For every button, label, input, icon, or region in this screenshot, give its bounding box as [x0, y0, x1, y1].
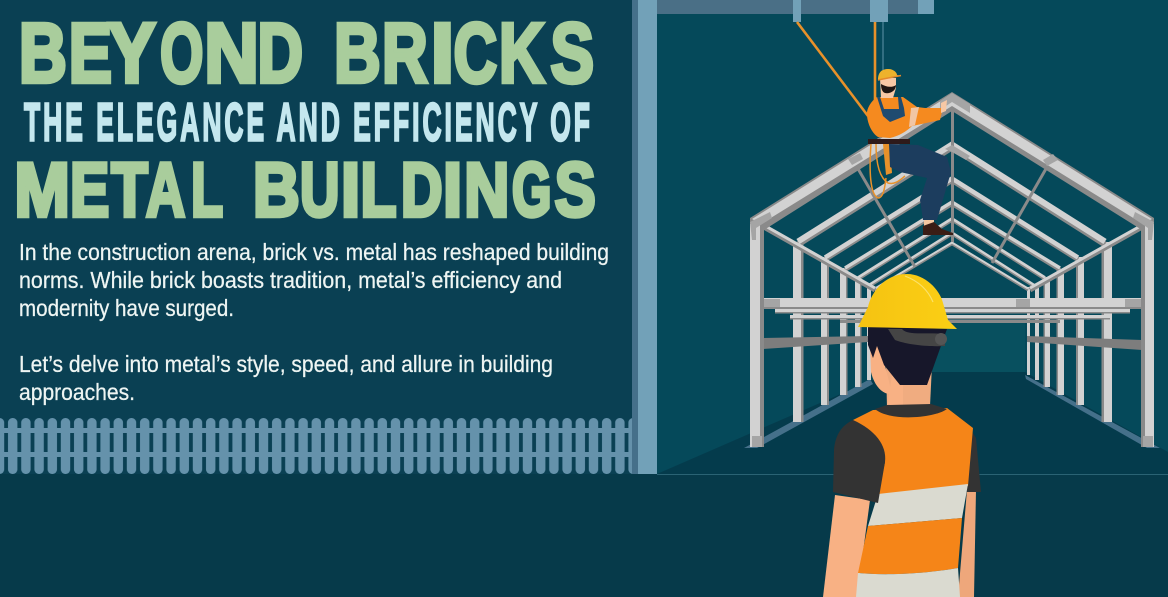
- title line: Beyond Bricks: Y: [108, 6, 156, 100]
- hard hat: [858, 274, 957, 329]
- title line: Metal Buildings: L: [361, 148, 396, 233]
- title line: Metal Buildings: B: [253, 148, 300, 233]
- subtitle line: THE ELEGANCE AND EFFICIENCY OF: [24, 94, 590, 153]
- title line: Metal Buildings: S: [555, 148, 596, 233]
- title line: Beyond Bricks: S: [550, 6, 594, 100]
- title line: Metal Buildings: N: [464, 148, 509, 233]
- title line: Metal Buildings: U: [300, 148, 339, 233]
- foreground worker: [823, 274, 981, 597]
- title line: Metal Buildings: I: [443, 148, 462, 233]
- background: ground: [0, 474, 1168, 597]
- hair: [868, 326, 947, 385]
- glove: [909, 107, 919, 127]
- title line: Metal Buildings: D: [401, 148, 442, 233]
- paragraph one: norms. While brick boasts tradition, metal’s efficiency and: [19, 267, 562, 293]
- ropes: [797, 22, 883, 116]
- shoe: [923, 222, 953, 235]
- ankle: [924, 220, 934, 226]
- side rails: [763, 336, 868, 349]
- side eave beams: [762, 226, 875, 290]
- ground line: [657, 474, 1168, 475]
- title line: Metal Buildings: L: [191, 148, 223, 233]
- title line: Beyond Bricks: E: [69, 6, 112, 100]
- hard hat: [878, 69, 901, 80]
- background: left panel: [0, 0, 632, 474]
- front left post: [750, 224, 760, 447]
- metal building frame: [744, 92, 1160, 448]
- paragraph two: Let’s delve into metal’s style, speed, and allure in building: [19, 351, 553, 377]
- receding roof trusses: [798, 144, 1105, 290]
- cross beams: [775, 309, 1130, 312]
- receding posts left: [793, 242, 878, 422]
- right arm: [958, 490, 976, 597]
- front roof truss: [750, 92, 1154, 230]
- king post: [951, 104, 954, 242]
- title line: Metal Buildings: I: [341, 148, 360, 233]
- neck: [886, 365, 932, 408]
- roof gusset plates: [750, 93, 1154, 240]
- title line: Beyond Bricks: B: [334, 6, 381, 100]
- title line: Beyond Bricks: B: [19, 6, 67, 100]
- back wall of the building: [925, 322, 1025, 372]
- orange torso and arm: [867, 97, 943, 138]
- title line: Beyond Bricks: R: [382, 6, 428, 100]
- vest upper orange: [853, 408, 973, 495]
- helmet strap: [888, 329, 945, 346]
- paragraph one: modernity have surged.: [19, 295, 234, 321]
- title line: Beyond Bricks: O: [160, 6, 203, 100]
- title line: Beyond Bricks: C: [454, 6, 497, 100]
- floor rails: [744, 379, 873, 448]
- belt: [868, 139, 910, 144]
- title line: Metal Buildings: G: [512, 148, 551, 233]
- legs: [889, 144, 951, 220]
- title line: Beyond Bricks: K: [499, 6, 545, 100]
- beard: [881, 84, 896, 93]
- diagonal braces: [857, 167, 915, 267]
- building floor: [657, 372, 1168, 474]
- picket fence: [0, 418, 632, 474]
- hand: [941, 100, 947, 113]
- worker on the roof: [867, 69, 953, 235]
- front right post: [1145, 224, 1154, 447]
- right sleeve: [966, 430, 981, 492]
- receding posts right: [1027, 242, 1112, 422]
- title line: Beyond Bricks: D: [258, 6, 303, 100]
- title line: Beyond Bricks: N: [204, 6, 259, 100]
- intro text block: [19, 239, 609, 405]
- left arm: [823, 495, 870, 597]
- harness straps: [870, 144, 886, 198]
- ear and cheek: [870, 345, 892, 394]
- collar: [875, 404, 947, 417]
- title line: Metal Buildings: T: [111, 148, 148, 233]
- background: warehouse wall: [657, 0, 1168, 474]
- reflective stripe two: [856, 568, 960, 597]
- paragraph two: approaches.: [19, 379, 135, 405]
- title: [14, 6, 596, 233]
- steel pillar and top beam: [632, 0, 934, 474]
- title line: Metal Buildings: M: [14, 148, 70, 233]
- reflective stripe one: [868, 484, 968, 526]
- overalls bib: [877, 97, 905, 122]
- title line: Metal Buildings: A: [146, 148, 185, 233]
- left sleeve: [833, 420, 885, 503]
- paragraph one: In the construction arena, brick vs. metal has reshaped building: [19, 239, 609, 265]
- title line: Beyond Bricks: I: [431, 6, 454, 100]
- neck and face: [880, 78, 896, 98]
- vest lower orange: [858, 518, 962, 574]
- title line: Metal Buildings: E: [70, 148, 109, 233]
